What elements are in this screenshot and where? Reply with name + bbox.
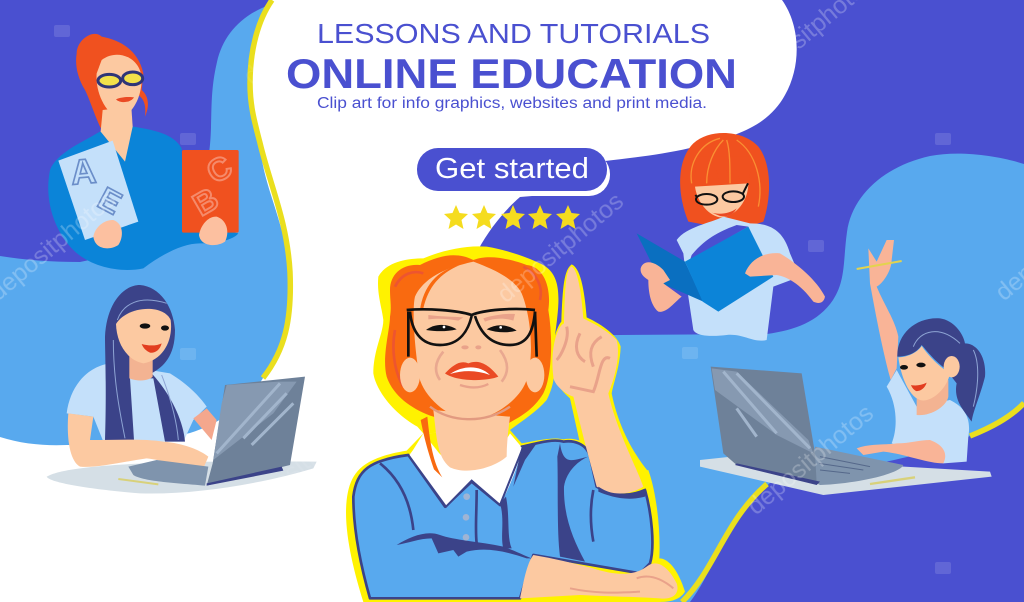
get started button [417,148,610,196]
ear [944,356,960,377]
left arm [68,413,208,468]
head outline [373,246,558,433]
heading: online education: ONLINE EDUCATION [286,50,737,97]
waist fold [397,533,532,558]
laptop streaks [217,383,293,453]
collar back [410,433,523,507]
girl with laptop left [47,285,317,493]
stock watermarks: depositphotos [492,187,629,309]
eyes [140,323,169,331]
teacher dress [48,127,238,270]
face [695,183,748,217]
cheek wrinkles [436,350,507,382]
resting arm and hand [520,555,678,599]
stock watermarks: depositphotos [236,401,373,523]
yellow sticker outline [346,246,685,602]
shirt [677,217,800,341]
subtitle: Clip art for info graphics, websites and print media. [317,95,707,112]
five star rating [444,205,580,229]
hair strand [421,417,442,477]
resting hand creases [570,577,673,593]
desk [47,461,317,493]
teacher face [97,55,142,118]
hair [680,133,769,225]
main girl pointing up [346,246,685,602]
neck [433,410,510,471]
laptop base [810,447,903,485]
laptop lid [711,367,817,483]
laptop keyboard lines [819,457,870,473]
eyelids [428,314,515,322]
left cover [637,233,703,302]
faint camera watermarks [54,25,951,574]
dress folds [380,443,593,562]
desk [700,457,992,495]
body outline [346,430,685,602]
heading: lessons and tutorials: LESSONS AND TUTORIALS [317,18,710,49]
title block [286,18,737,112]
neck [129,355,153,380]
laptop lid [207,377,305,486]
yellow wave line left [250,0,290,378]
hair streaks [691,138,760,207]
hand and arm outline [551,264,648,490]
collar shadow [513,443,537,487]
pencil on desk [118,479,158,484]
button label: Get started [435,153,589,185]
letter C: C [200,148,238,190]
smile [142,343,162,353]
arm on desk [857,440,945,463]
neck [917,380,948,415]
teacher left hand [93,220,122,248]
jaw shadow [430,407,510,419]
teeth [450,367,490,375]
eyes [426,325,517,332]
book pages [690,225,748,260]
teacher right hand [199,217,227,245]
letter paper [58,141,138,240]
teacher lips [116,97,134,102]
hair highlights [913,332,978,407]
button body [417,148,607,191]
face [116,309,171,363]
dress [353,441,652,598]
lower lip shadow [460,384,488,387]
yellow wave line right [682,403,1024,602]
smile [911,383,927,391]
open book [637,225,773,312]
laptop base [128,460,208,486]
dress buttons [463,493,470,541]
shirt [67,363,207,442]
teacher neck [101,107,133,162]
button shadow [421,153,610,196]
girl with raised hand and laptop [700,240,992,495]
laptop hinge shadow [735,463,820,485]
background: white central area [0,0,797,602]
shirt [887,370,969,463]
finger creases [557,327,610,392]
right arm [745,253,825,303]
eyes [900,363,926,370]
paper sheet [58,141,138,240]
laptop hinge shadow [207,467,283,486]
card body [182,150,239,233]
sleeve cuff [598,487,646,499]
letter A: A [69,152,98,193]
teacher with letter cards [48,34,239,270]
bun shading [393,267,541,387]
girl reading book [637,133,825,341]
pencil on desk [870,477,915,484]
face [898,346,950,401]
laptop screen reflection [213,382,297,460]
collar flaps [409,437,523,507]
stock watermarks: depositphotos [742,399,879,521]
mouth [712,208,737,216]
sleeve pleat [557,443,588,562]
left arm [641,262,682,312]
front pleat [500,497,512,548]
forehead hair wisp [420,265,460,310]
letter B: B [186,180,224,223]
hair buns and back hair [385,255,551,423]
raised arm and hand [868,240,898,380]
pencil in hand [857,261,902,269]
glasses [695,183,748,205]
fringe [694,157,752,186]
teacher hair [76,34,148,130]
hair [105,285,185,442]
laptop streaks [723,372,810,448]
raised arm and pointing hand [552,267,643,494]
letter E: E [92,180,128,221]
laptop screen reflection [712,368,813,453]
background: right light blue blob [470,154,1024,602]
lips [445,362,498,380]
eye highlights [443,326,502,329]
hair highlights [113,300,178,440]
glasses [407,309,537,357]
teacher glasses [98,72,143,87]
collar edge line [408,448,523,507]
red card [182,148,239,233]
right arm [193,408,217,440]
background: left light blue blob [0,0,300,602]
hair [897,318,985,422]
face [414,262,531,421]
right cover [685,227,773,312]
nose [461,345,481,349]
seams [380,463,593,543]
ears [400,358,544,392]
